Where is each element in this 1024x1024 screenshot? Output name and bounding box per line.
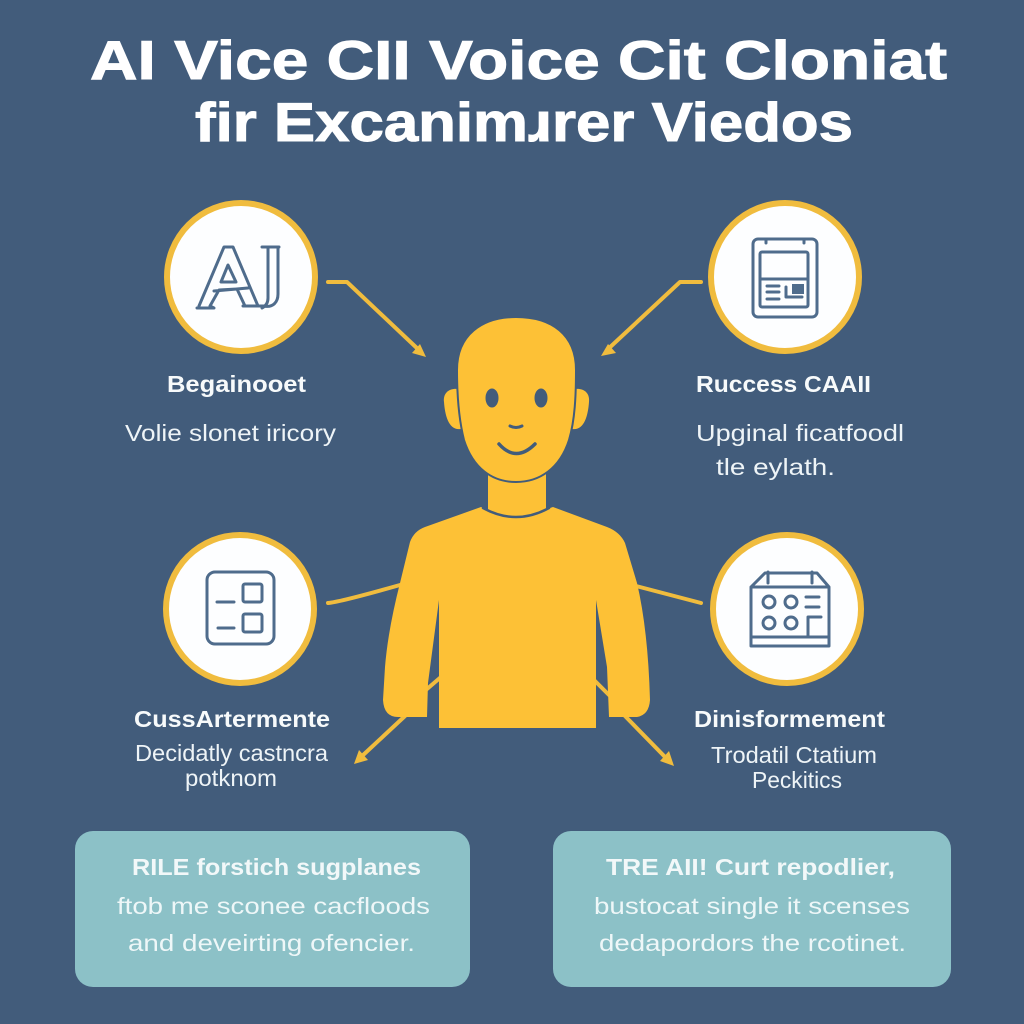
icon circle: AI (167, 203, 315, 351)
panel body: bustocat single it scenses (594, 893, 910, 919)
panel body: dedapordors the rcotinet. (599, 930, 906, 956)
panel body (594, 893, 910, 956)
head (457, 317, 576, 482)
description: Upginal ficatfoodl (696, 420, 904, 446)
description: Volie slonet iricory (125, 420, 337, 446)
icon circle: document (711, 203, 859, 351)
node: top right (696, 203, 904, 480)
node: middle right (694, 535, 885, 793)
description: potknom (185, 765, 277, 791)
collar (483, 508, 549, 517)
node: top left (125, 203, 337, 446)
arrow: top left to head (328, 282, 426, 357)
panel: bottom right (553, 831, 951, 987)
panel heading: RILE forstich sugplanes (132, 854, 421, 880)
connector: middle left (328, 585, 400, 603)
left eye (486, 388, 498, 408)
left ear (444, 389, 461, 429)
heading: Dinisformement (694, 706, 885, 732)
panel body: ftob me sconee cacfloods (117, 893, 430, 919)
nose (510, 426, 522, 428)
heading: Begainooet (167, 371, 306, 397)
description (696, 420, 904, 480)
torso and arms (383, 507, 650, 728)
panel body (117, 893, 430, 956)
panel body: and deveirting ofencier. (128, 930, 415, 956)
panel: bottom left (75, 831, 470, 987)
description: Peckitics (752, 767, 842, 793)
description (135, 740, 328, 791)
arrow: top right to head (601, 282, 701, 356)
icon circle: calendar (713, 535, 861, 683)
title (90, 29, 947, 153)
node: middle left (134, 535, 330, 791)
right ear (572, 389, 589, 429)
arrow: bottom right (595, 681, 674, 766)
right eye (534, 388, 548, 408)
description (711, 742, 877, 793)
heading: Ruccess CAAII (696, 371, 871, 397)
panel heading: TRE AII! Curt repodlier, (606, 854, 895, 880)
central person figure (383, 317, 650, 728)
connector: middle right (636, 586, 701, 603)
arrow: bottom left (354, 677, 441, 764)
title: AI Vice CII Voice Cit Cloniat (90, 29, 947, 91)
smile (499, 444, 535, 454)
description: Decidatly castncra (135, 740, 328, 766)
description: Trodatil Ctatium (711, 742, 877, 768)
description: tle eylath. (716, 454, 835, 480)
neck (488, 470, 546, 520)
icon circle: layout grid (166, 535, 314, 683)
heading: CussArtermente (134, 706, 330, 732)
title: fir Excanimɹrer Viedos (195, 91, 853, 153)
